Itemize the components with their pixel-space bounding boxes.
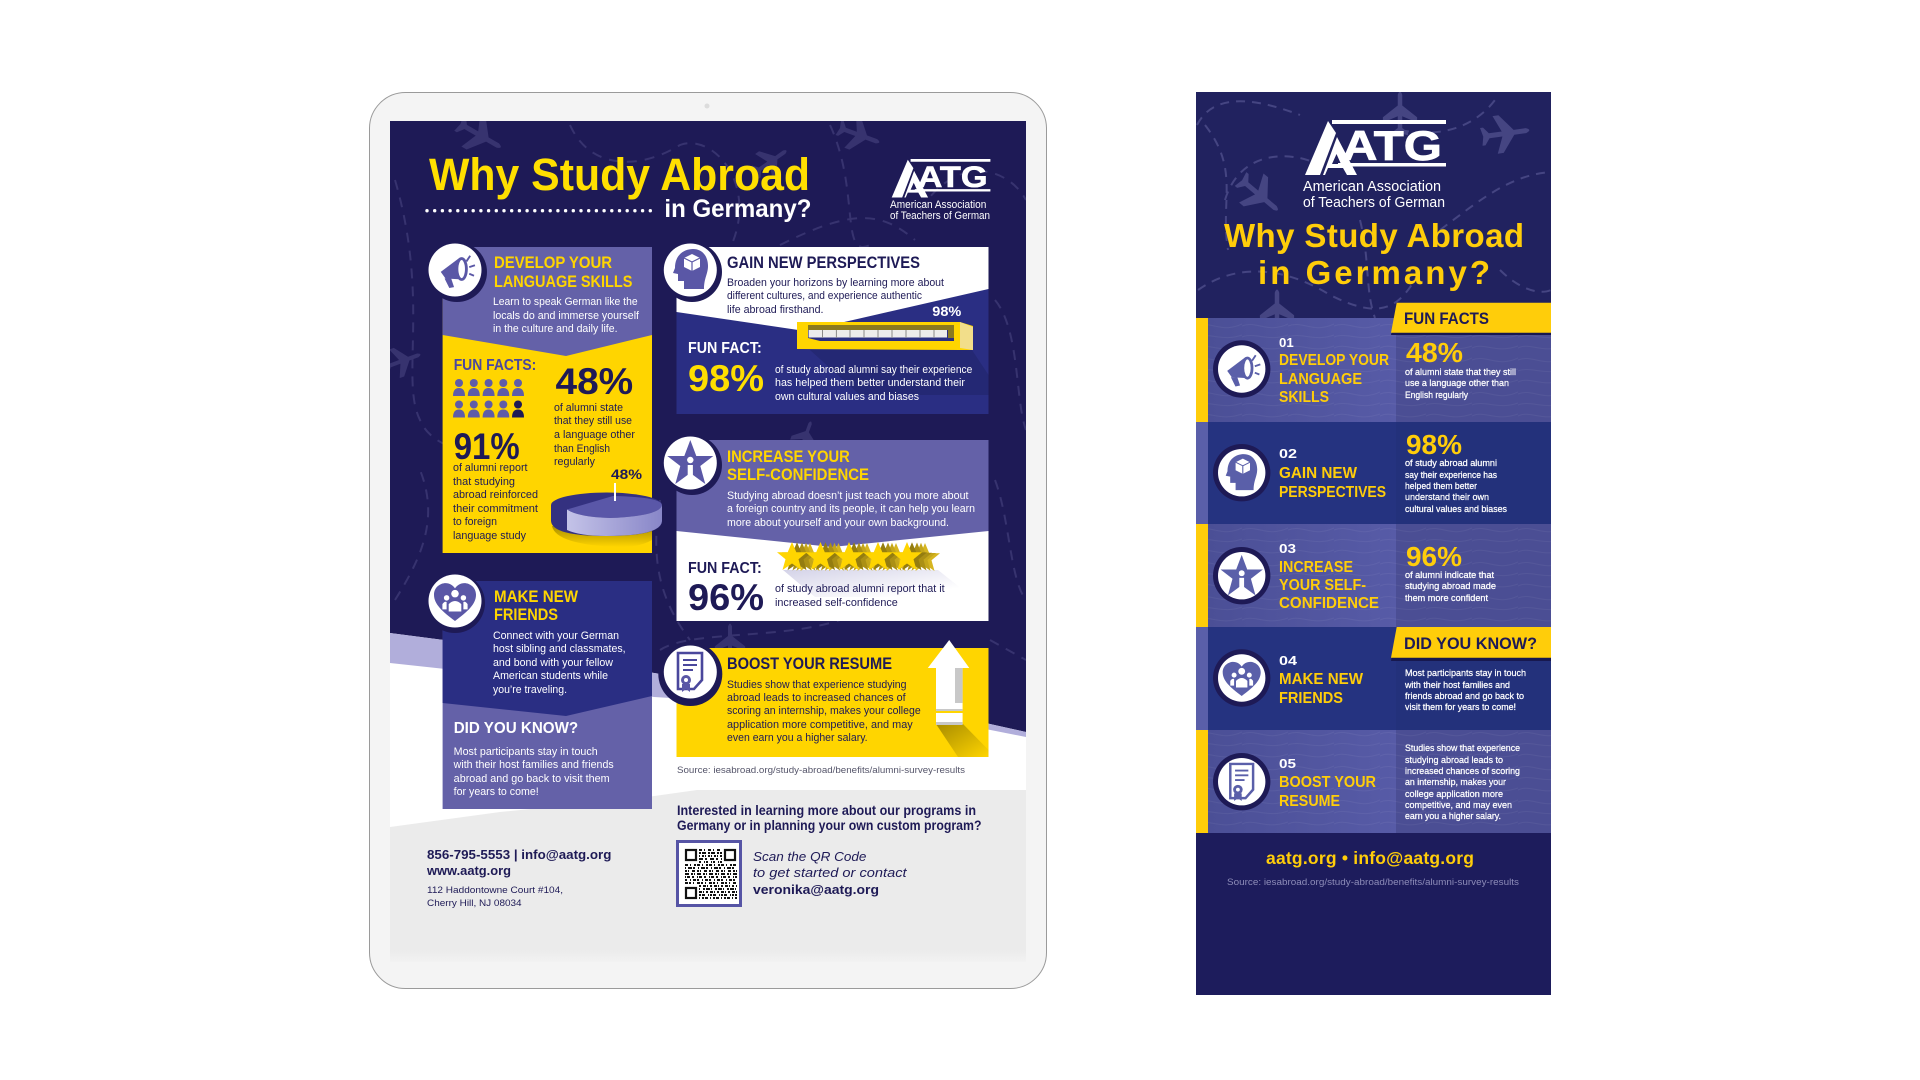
text: did you know: with their host families and friends: [453, 759, 614, 771]
text: develop body: in the culture and daily life.: [493, 323, 618, 335]
text: did you know: [453, 720, 614, 798]
stat: 96%: of alumni indicate that: [1405, 569, 1494, 580]
stat: 91%: [453, 426, 538, 542]
stat: 48%: of alumni state: [554, 402, 623, 414]
heading: gain: PERSPECTIVES: [1279, 484, 1386, 501]
heading: boost: [1279, 756, 1376, 810]
panel: gain new perspectives: [662, 242, 988, 414]
stat: 91%: of alumni report: [453, 462, 528, 474]
text: boost: [1405, 742, 1520, 821]
heading: develop: [1279, 335, 1389, 406]
heading: increase: [727, 448, 869, 484]
stat: 96%: studying abroad made: [1405, 580, 1496, 591]
heading: develop: 01: [1279, 335, 1294, 350]
heading: boost: BOOST YOUR: [1279, 774, 1376, 791]
stat: 48%: of alumni state that they still: [1405, 366, 1516, 377]
heading: develop: LANGUAGE SKILLS: [494, 273, 632, 291]
icon: megaphone: [1213, 340, 1270, 398]
text: increase body: more about yourself and your own background.: [727, 517, 949, 529]
text: friends body: Connect with your German: [493, 630, 619, 642]
text: boost: earn you a higher salary.: [1405, 810, 1501, 821]
source: Source: iesabroad.org/study-abroad/benefits/alumni-survey-results: [1227, 877, 1520, 887]
text: did you know: for years to come!: [454, 786, 539, 798]
text: boost: studying abroad leads to: [1405, 754, 1503, 765]
heading: develop: LANGUAGE: [1279, 371, 1362, 388]
stat: 98%: own cultural values and biases: [775, 391, 919, 403]
text: boost: college application more: [1405, 788, 1503, 799]
stat: 48%: 48%: [556, 361, 633, 402]
logo: AATG: American Association: [890, 199, 986, 211]
stat: 91%: language study: [453, 530, 527, 542]
logo: AATG: of Teachers of German: [890, 210, 990, 222]
text: friends body: you’re traveling.: [493, 684, 567, 696]
heading: boost: BOOST YOUR RESUME: [727, 655, 892, 673]
row 03: [1196, 524, 1551, 627]
text: boost body: [727, 679, 921, 744]
text: scan qr: veronika@aatg.org: [753, 882, 879, 897]
heading: make new friends: FRIENDS: [1279, 690, 1343, 707]
text: call to action: Germany or in planning your own custom program?: [677, 818, 982, 833]
title: Why Study Abroad: [429, 149, 810, 200]
stat: 98%: of study abroad alumni say their experience: [775, 364, 972, 376]
heading: gain: GAIN NEW: [1279, 465, 1358, 482]
stat: 96%: increased self-confidence: [775, 597, 898, 609]
text: boost body: application more competitive, and may: [727, 719, 913, 731]
tab: fun facts: FUN FACTS: [1404, 309, 1489, 328]
stat: 91%: their commitment: [453, 503, 538, 515]
text: gain body: life abroad firsthand.: [727, 304, 824, 316]
title: banner: in Germany?: [1258, 254, 1490, 291]
heading: develop: SKILLS: [1279, 389, 1329, 406]
tablet screen background: [390, 121, 1026, 962]
stat: 91%: to foreign: [453, 516, 497, 528]
tab: fun facts: [1391, 303, 1551, 335]
text: did you know: [1404, 667, 1526, 712]
stat: 96%: [1405, 541, 1496, 603]
stat: 91%: abroad reinforced: [453, 489, 538, 501]
logo: AATG banner: American Association: [1303, 179, 1441, 195]
stat: 48%: a language other: [554, 429, 635, 441]
stat: 98%: helped them better: [1405, 480, 1477, 491]
heading: develop: DEVELOP YOUR: [1279, 352, 1389, 369]
footer links: aatg.org • info@aatg.org: [1266, 848, 1474, 868]
stat: 48%: use a language other than: [1405, 377, 1509, 388]
text: scan qr: to get started or contact: [753, 865, 908, 880]
chart: 98% bar: [797, 303, 988, 395]
text: call to action: Interested in learning more about our programs in: [677, 803, 976, 818]
heading: make new friends: 04: [1279, 653, 1298, 668]
text: boost body: scoring an internship, makes your college: [727, 705, 921, 717]
icon: head: [662, 242, 722, 302]
row 02: [1196, 422, 1551, 524]
banner infographic: [1196, 92, 1551, 995]
text: increase body: [727, 490, 975, 529]
text: boost: an internship, makes your: [1405, 776, 1506, 787]
text: did you know: friends abroad and go back to: [1405, 690, 1524, 701]
stat: 98%: understand their own: [1405, 491, 1489, 502]
title: banner: [1224, 217, 1524, 291]
stat: 98%: of study abroad alumni: [1405, 457, 1497, 468]
icon: up arrow: [928, 640, 988, 757]
icon: qr code: [678, 842, 740, 906]
title: in Germany?: [664, 195, 811, 223]
heading: make new friends: [1279, 653, 1364, 707]
title: banner: Why Study Abroad: [1224, 217, 1524, 254]
heading: increase: CONFIDENCE: [1279, 595, 1379, 612]
stat: 96%: 96%: [1406, 541, 1462, 572]
heading: make new friends: MAKE NEW: [1279, 671, 1364, 688]
text: gain body: different cultures, and experience authentic: [727, 290, 923, 302]
stat: 48%: that they still use: [554, 415, 632, 427]
chart: 3d pie 48%: 48%: [611, 467, 642, 482]
heading: make new friends: MAKE NEW: [494, 588, 578, 606]
title: [427, 149, 811, 223]
stat: 48%: [1405, 337, 1516, 400]
stat: 48%: English regularly: [1405, 389, 1468, 400]
stat: 98%: has helped them better understand their: [775, 377, 965, 389]
stat: 96%: FUN FACT:: [688, 560, 762, 577]
text: friends body: host sibling and classmates,: [493, 643, 626, 655]
heading: gain: [1279, 446, 1386, 501]
icon: head: [1213, 444, 1270, 501]
tablet mockup: [370, 92, 1046, 988]
icon: friends heart: [425, 573, 485, 633]
panel: boost your resume: [658, 640, 988, 757]
stat: 98%: 98%: [688, 358, 764, 399]
panel: make new friends: [425, 573, 652, 809]
heading: boost: 05: [1279, 756, 1296, 771]
text: contact details: [426, 848, 611, 909]
flight path background pattern: [379, 107, 1026, 662]
icon: megaphone: [427, 242, 487, 302]
icon: friends heart: [1213, 649, 1270, 707]
heading: develop: DEVELOP YOUR: [494, 254, 612, 272]
icon: certificate: [658, 642, 722, 706]
heading: boost: RESUME: [1279, 793, 1340, 810]
text: contact details: 856-795-5553 | info@aatg.org: [427, 848, 611, 862]
stat: 48%: 48%: [1406, 337, 1463, 368]
text: did you know: DID YOU KNOW?: [454, 720, 578, 737]
stat: 96%: them more confident: [1405, 592, 1488, 603]
text: boost body: even earn you a higher salary.: [727, 732, 868, 744]
heading: increase: SELF-CONFIDENCE: [727, 466, 869, 484]
tab: did you know: [1391, 627, 1551, 661]
text: did you know: Most participants stay in touch: [1405, 667, 1526, 678]
stat: 91%: that studying: [453, 476, 515, 488]
stat: 48%: [554, 361, 635, 468]
heading: increase: INCREASE: [1279, 559, 1353, 576]
text: boost: increased chances of scoring: [1405, 765, 1520, 776]
stat: 91%: 91%: [454, 426, 520, 467]
icon: certificate: [1213, 753, 1270, 810]
icon: star person: [1213, 547, 1270, 604]
chart: 3d pie 48%: [551, 467, 662, 547]
text: increase body: a foreign country and its people, it can help you learn: [727, 503, 975, 515]
text: did you know: abroad and go back to visit them: [454, 773, 610, 785]
text: scan qr: [753, 849, 908, 897]
text: develop body: locals do and immerse yourself: [493, 310, 639, 322]
row 01: [1196, 318, 1551, 422]
heading: increase: INCREASE YOUR: [727, 448, 850, 466]
text: boost body: abroad leads to increased chances of: [727, 692, 906, 704]
stat: 96%: [688, 560, 945, 618]
row 05: [1196, 730, 1551, 833]
icon: star person: [662, 435, 722, 495]
heading: increase: YOUR SELF-: [1279, 577, 1366, 594]
text: call to action: [677, 803, 982, 833]
icon: people pictogram: [453, 379, 524, 418]
stat: 48%: than English: [554, 443, 610, 455]
panel: develop your language skills: [427, 242, 662, 553]
text: source: Source: iesabroad.org/study-abroad/benefits/alumni-survey-results: [677, 765, 966, 775]
heading: gain: 02: [1279, 446, 1297, 461]
heading: increase: 03: [1279, 541, 1296, 556]
text: increase body: Studying abroad doesn’t just teach you more about: [727, 490, 969, 502]
stat: 98%: 98%: [1406, 429, 1462, 460]
text: scan qr: Scan the QR Code: [753, 849, 866, 864]
panel: increase your self-confidence: [662, 435, 988, 621]
text: friends body: American students while: [493, 670, 608, 682]
stat: 98%: say their experience has: [1405, 469, 1497, 480]
stat: 98%: [1405, 429, 1507, 514]
text: contact details: Cherry Hill, NJ 08034: [427, 898, 522, 909]
text: friends body: and bond with your fellow: [493, 657, 613, 669]
heading: gain: GAIN NEW PERSPECTIVES: [727, 254, 920, 272]
logo: AATG banner: ATG: [1342, 122, 1442, 169]
stat: 98%: [688, 340, 972, 403]
flight path background pattern: [1197, 92, 1551, 333]
chart: 98% bar: 98%: [932, 303, 962, 319]
text: develop body: [493, 296, 639, 335]
text: boost: competitive, and may even: [1405, 799, 1512, 810]
tab: did you know: DID YOU KNOW?: [1404, 634, 1537, 653]
heading: fun facts: FUN FACTS:: [454, 357, 536, 374]
text: gain body: Broaden your horizons by learning more about: [727, 277, 944, 289]
logo: AATG banner: of Teachers of German: [1303, 195, 1445, 211]
heading: make new friends: [494, 588, 578, 624]
logo: AATG: [890, 159, 990, 222]
icon: five stars: [777, 542, 972, 597]
stat: 48%: regularly: [554, 456, 596, 468]
stat: 96%: of study abroad alumni report that it: [775, 583, 945, 595]
heading: develop: [494, 254, 632, 291]
text: boost: Studies show that experience: [1405, 742, 1520, 753]
text: contact details: 112 Haddontowne Court #104,: [427, 885, 563, 896]
text: boost body: Studies show that experience studying: [727, 679, 907, 691]
stat: 96%: 96%: [688, 577, 764, 618]
text: develop body: Learn to speak German like the: [493, 296, 638, 308]
text: gain body: [727, 277, 944, 316]
heading: increase: [1279, 541, 1379, 612]
text: did you know: with their host families and: [1404, 679, 1510, 690]
stat: 98%: FUN FACT:: [688, 340, 762, 357]
stat: 98%: cultural values and biases: [1405, 503, 1507, 514]
text: friends body: [493, 630, 626, 696]
heading: make new friends: FRIENDS: [494, 606, 558, 624]
text: contact details: www.aatg.org: [426, 864, 511, 878]
text: did you know: Most participants stay in touch: [454, 746, 598, 758]
logo: AATG: ATG: [918, 161, 988, 194]
text: did you know: visit them for years to come!: [1405, 701, 1516, 712]
row 04: [1196, 627, 1551, 730]
logo: AATG banner: [1303, 120, 1446, 211]
